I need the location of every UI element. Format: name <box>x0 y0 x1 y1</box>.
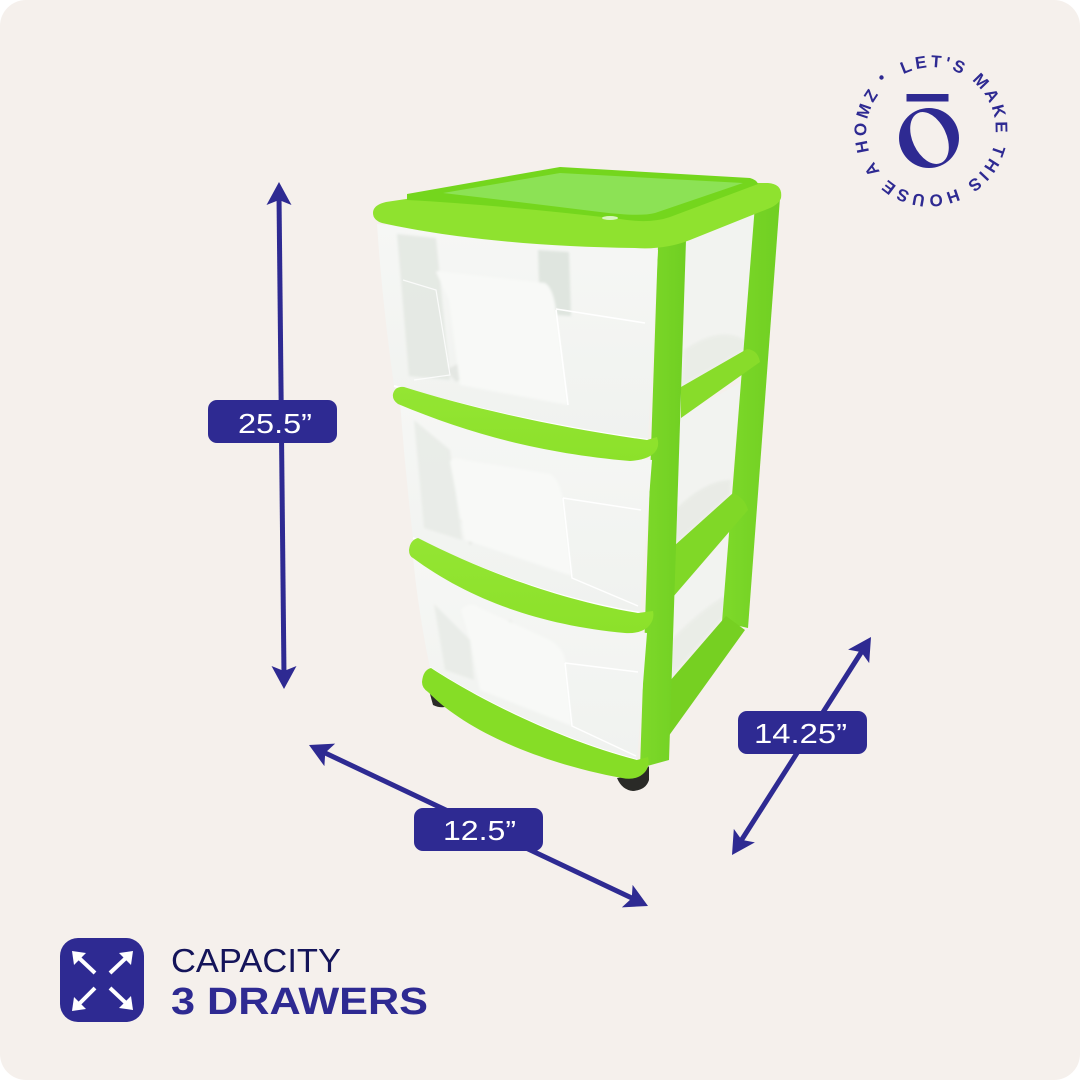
drawer 2 <box>400 402 652 613</box>
back right post <box>722 198 780 628</box>
circular slogan: LET'S MAKE THIS HOUSE A HOMZ <box>854 55 1008 207</box>
icon: expand arrows <box>60 938 144 1022</box>
side rails <box>650 349 760 762</box>
logo mark <box>899 94 959 170</box>
drawer 3 <box>413 557 647 760</box>
width dimension arrow <box>304 734 653 917</box>
lid <box>407 167 758 221</box>
product photo: green three-drawer storage cart <box>373 167 781 791</box>
capacity callout <box>60 938 428 1023</box>
drawer rim 3 <box>422 668 649 779</box>
drawer rim 1 <box>393 387 658 461</box>
depth label <box>738 711 867 754</box>
front right post <box>640 240 686 768</box>
capacity text: CAPACITY <box>171 942 341 979</box>
wheels <box>430 694 649 791</box>
height label: 25.5” <box>238 408 312 439</box>
depth dimension arrow <box>721 630 882 862</box>
depth label: 14.25” <box>754 718 847 749</box>
height dimension arrow <box>208 182 337 689</box>
capacity text: 3 DRAWERS <box>171 981 428 1023</box>
logo badge: Let's make this house a homz <box>854 55 1008 207</box>
drawer 1 <box>377 224 658 440</box>
width label: 12.5” <box>443 815 516 846</box>
capacity text <box>171 942 428 1023</box>
height label <box>208 400 337 443</box>
top frame <box>373 182 781 248</box>
width label <box>414 808 543 851</box>
side panels <box>669 207 756 680</box>
drawer rim 2 <box>409 538 653 633</box>
